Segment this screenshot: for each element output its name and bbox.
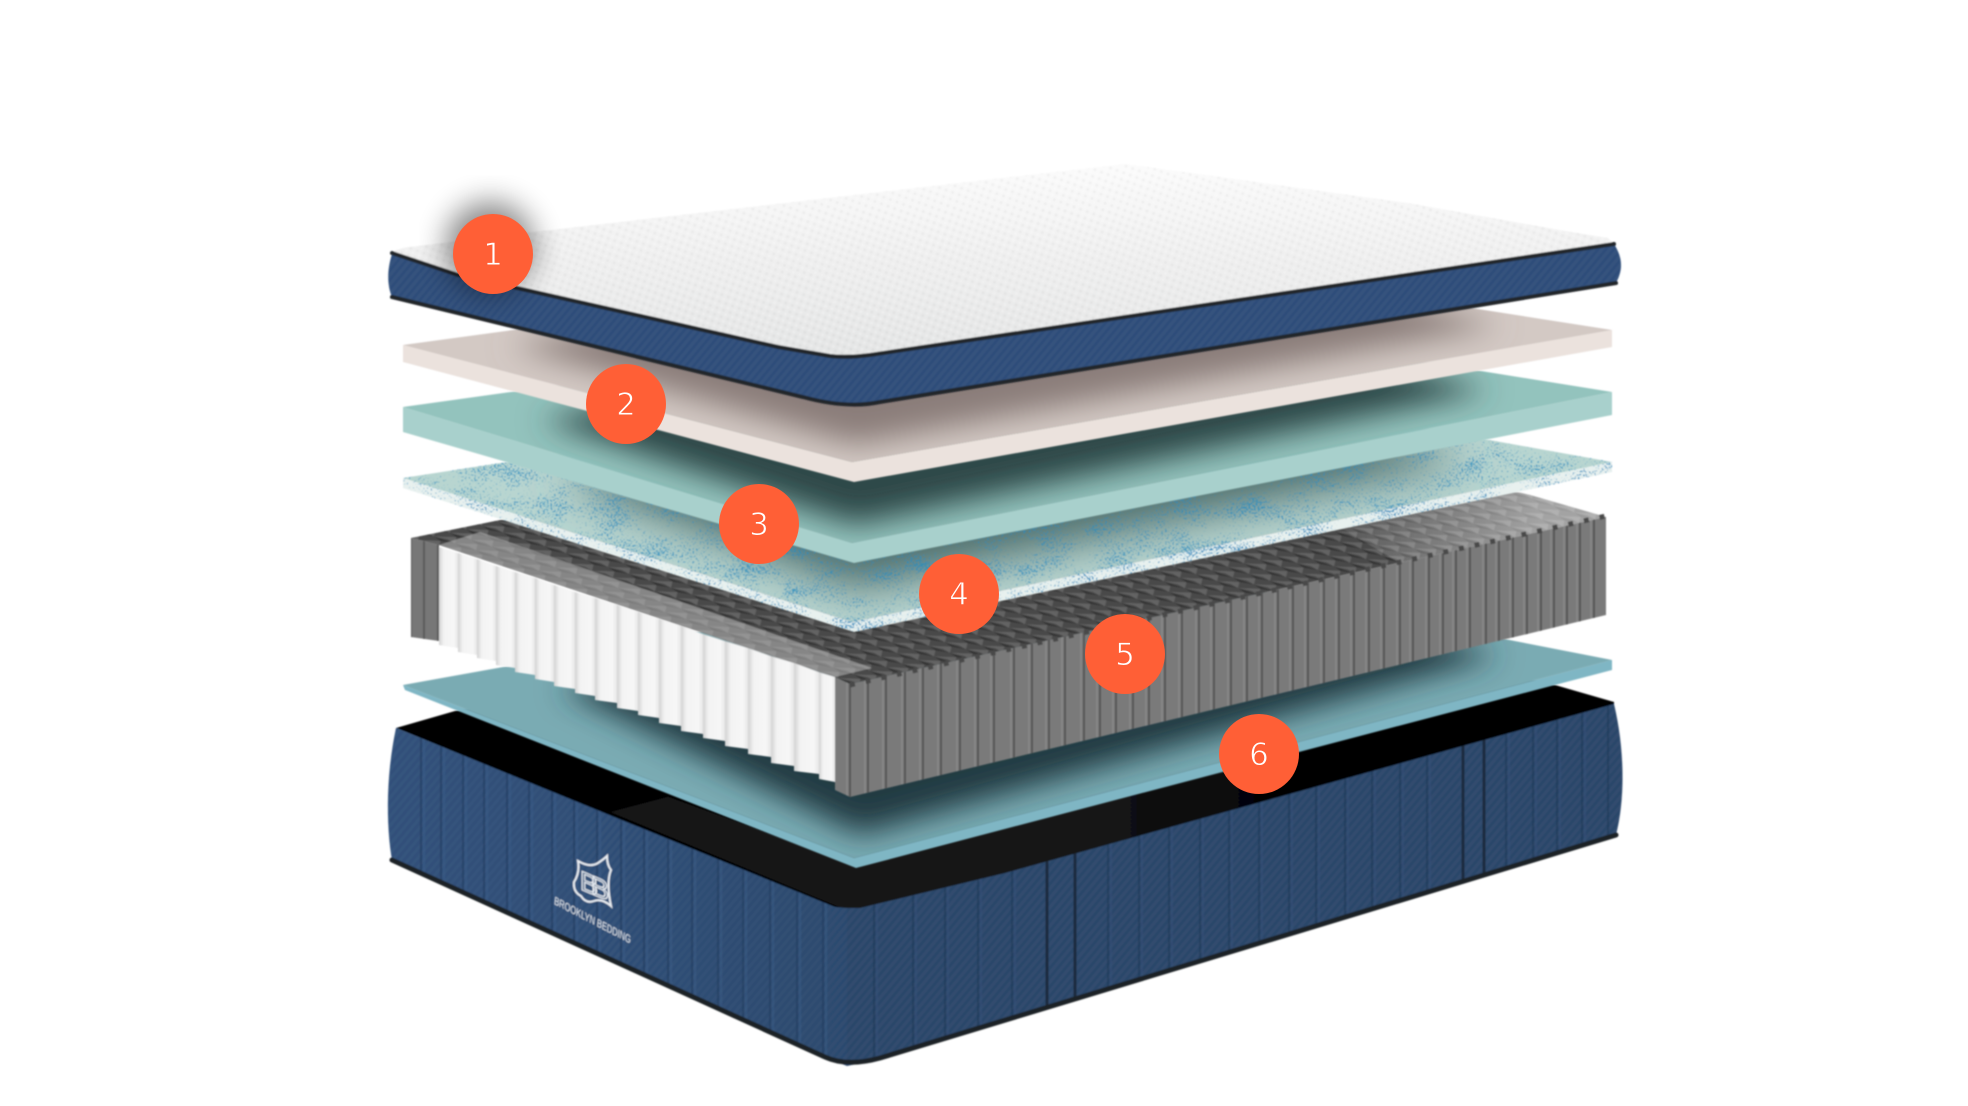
- base bottom piping: [392, 835, 1616, 1062]
- layer: pink memory foam: [402, 308, 1612, 483]
- logo: BB: [580, 865, 608, 907]
- spring block top cells: [411, 400, 1606, 684]
- white coil pockets: [439, 547, 835, 782]
- base left face with quilting: [386, 727, 848, 1067]
- logo: BROOKLYN BEDDING: [554, 895, 631, 947]
- logo: [554, 856, 631, 947]
- cover piping: [392, 244, 1614, 357]
- spring block left end stripes: [410, 537, 440, 642]
- gray coil pockets front face: [830, 510, 1610, 810]
- marker 3: 3: [749, 507, 769, 543]
- gray coil scalloped edge: [850, 516, 1606, 685]
- base right face with quilting: [840, 690, 1640, 1080]
- layer: quilted top cover: [388, 164, 1621, 405]
- base straps: [1045, 738, 1486, 1006]
- marker 2: [586, 364, 666, 444]
- marker 2: 2: [616, 387, 636, 423]
- marker 4: [919, 554, 999, 634]
- base interior: [396, 590, 1614, 910]
- gel foam side: [400, 460, 1615, 640]
- marker 1: 1: [483, 237, 503, 273]
- marker shadow: [446, 202, 534, 290]
- gel foam top: [404, 439, 1611, 623]
- marker 3: [719, 484, 799, 564]
- layer: gel-infused foam: [402, 439, 1614, 633]
- layer: support foam base: [402, 596, 1613, 869]
- marker 1: [453, 214, 533, 294]
- marker 6: [1219, 714, 1299, 794]
- cover top surface: [392, 164, 1614, 357]
- marker 4: 4: [949, 577, 969, 613]
- layer: mint comfort foam: [402, 370, 1613, 564]
- marker 6: 6: [1249, 737, 1269, 773]
- layer: pocketed coil springs: [410, 492, 1607, 798]
- layer: quilted base mattress: [386, 680, 1624, 1067]
- marker 5: [1085, 614, 1165, 694]
- marker 5: 5: [1115, 637, 1135, 673]
- cover blue side: [388, 244, 1621, 405]
